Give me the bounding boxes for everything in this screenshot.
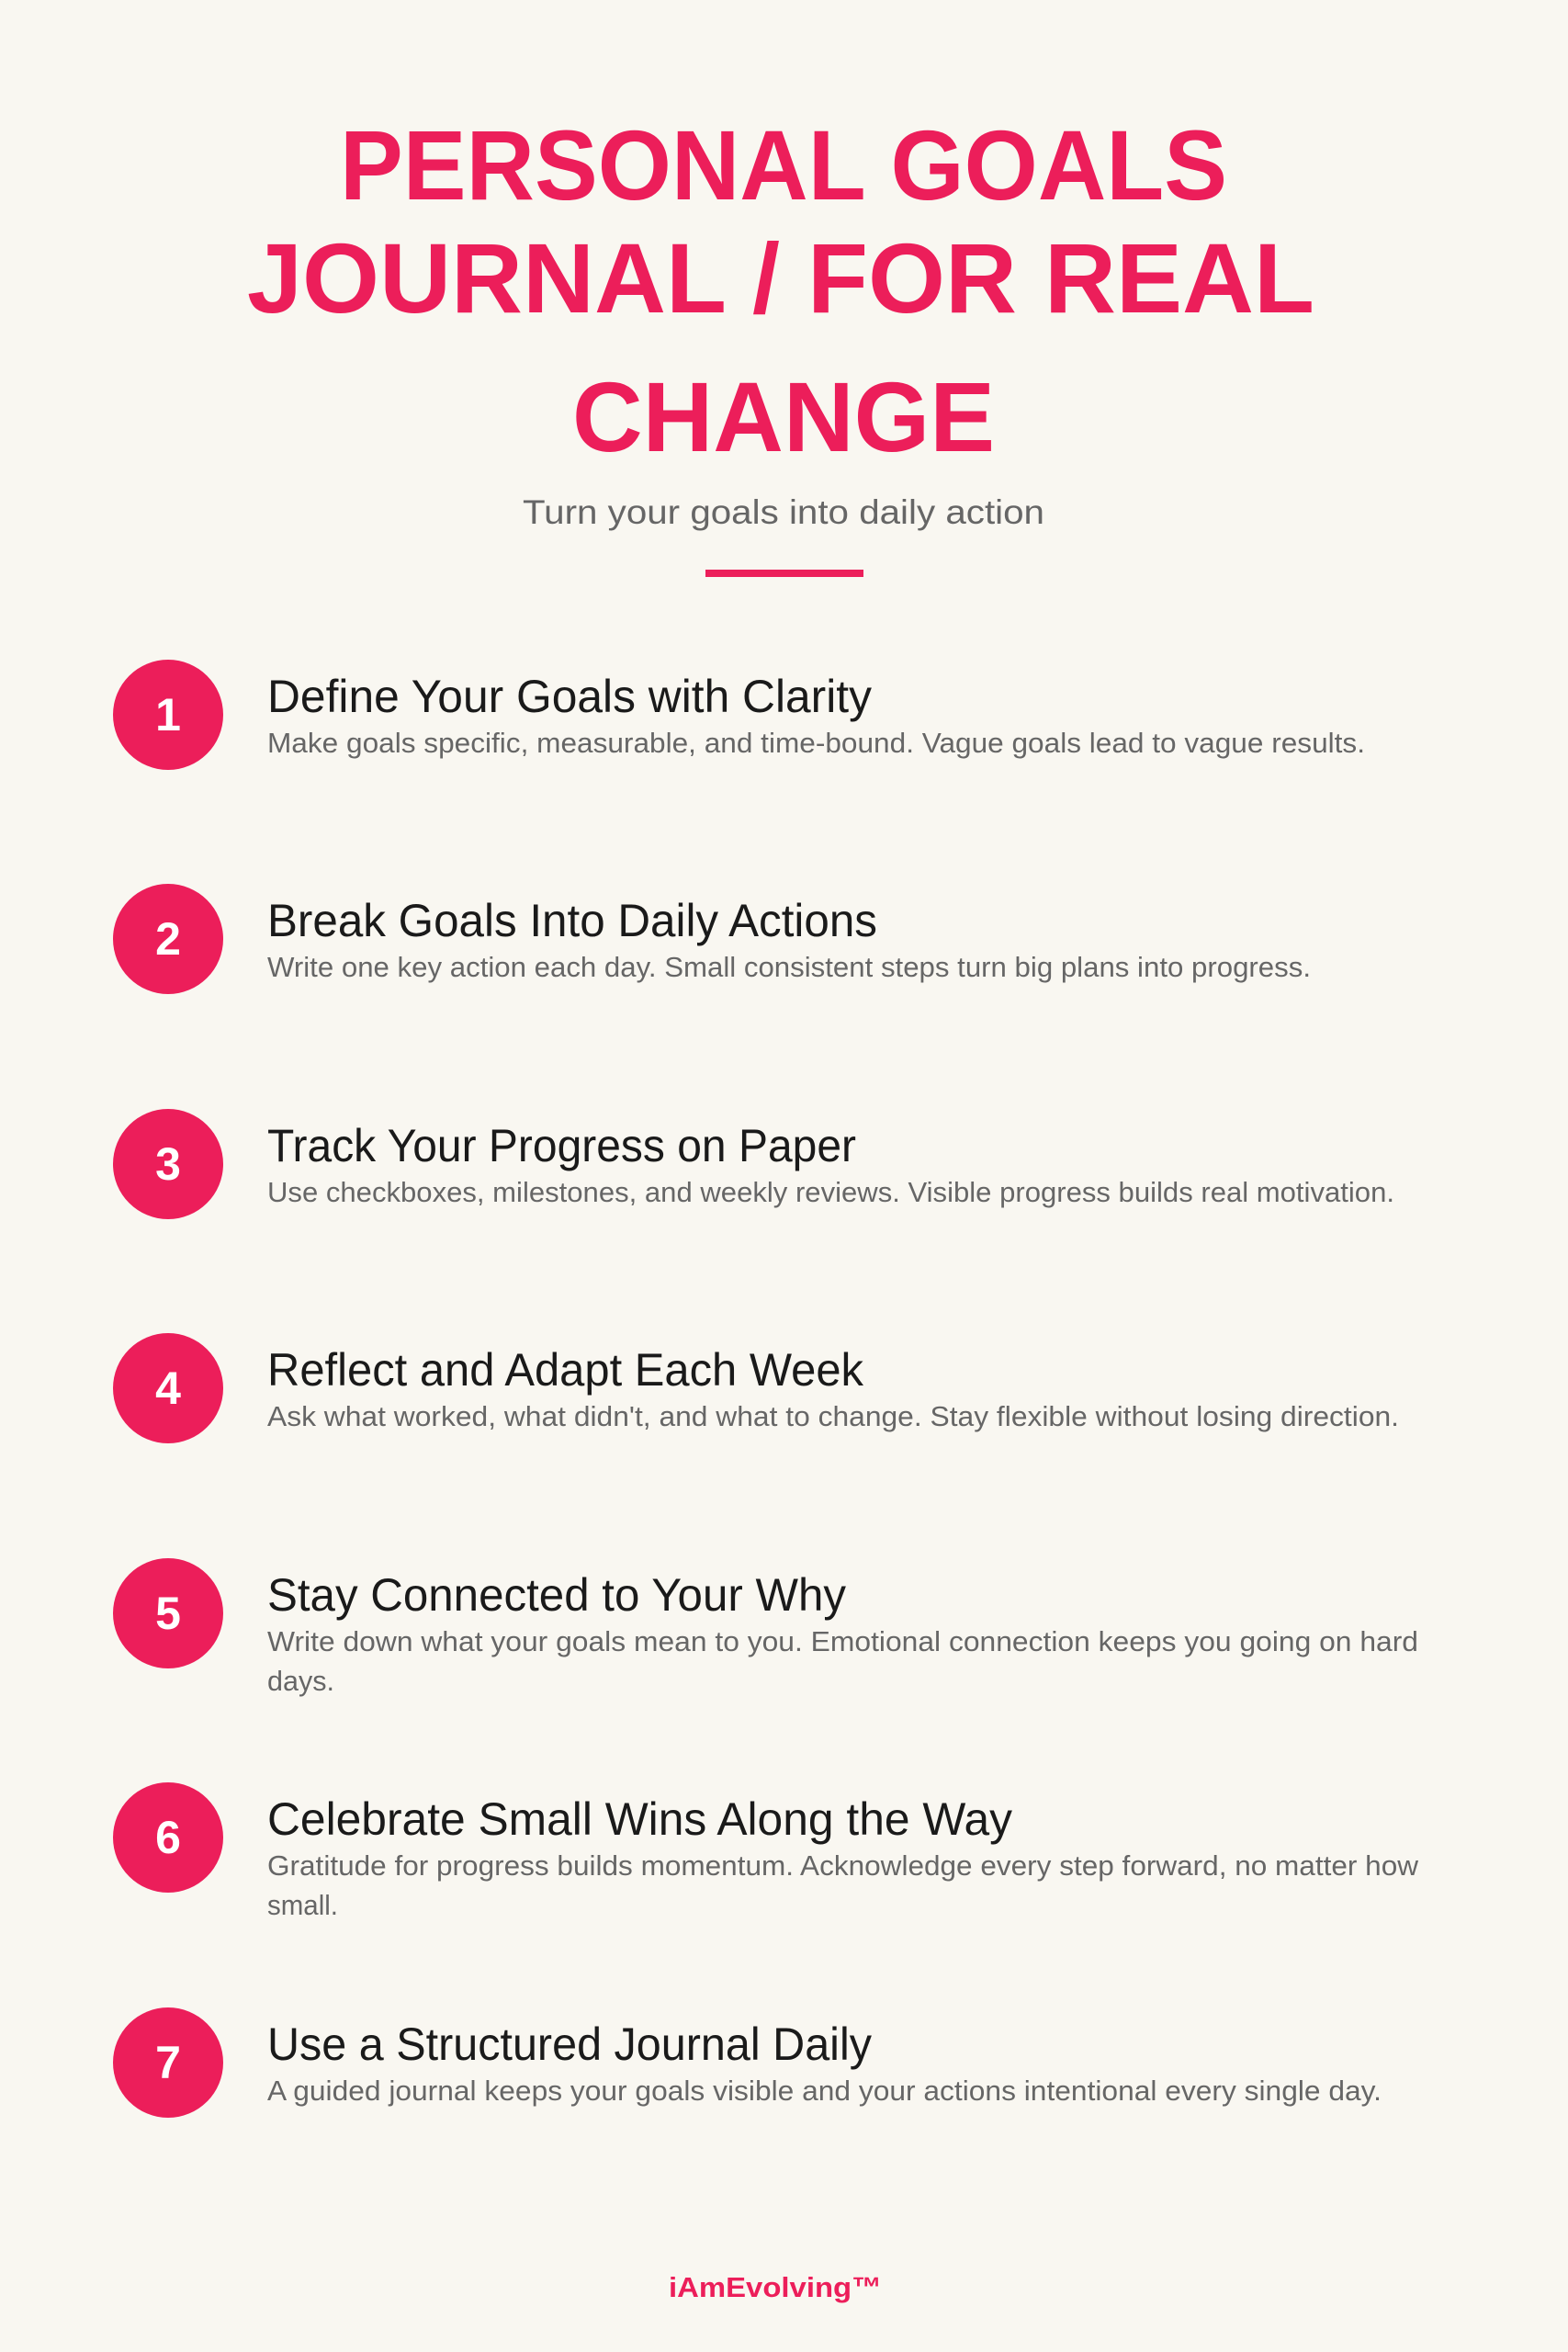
item 3: Track Your Progress on Paper — [267, 1120, 856, 1171]
item 1: Make goals specific, measurable, and time-bound. Vague goals lead to vague results. — [267, 727, 1365, 759]
item 2: Write one key action each day. Small consistent steps turn big plans into progress. — [267, 951, 1311, 983]
item 7: 7 — [155, 2037, 181, 2088]
item 5 — [113, 1558, 1418, 1697]
item 4 — [113, 1333, 1399, 1443]
item 5: Write down what your goals mean to you. Emotional connection keeps you going on hard — [267, 1625, 1418, 1657]
divider bar — [705, 570, 863, 577]
subtitle: Turn your goals into daily action — [523, 493, 1044, 531]
item 7: A guided journal keeps your goals visible and your actions intentional every single day. — [267, 2075, 1382, 2107]
item 5: 5 — [155, 1588, 181, 1639]
item 6: 6 — [155, 1812, 181, 1863]
item 3 — [113, 1109, 1394, 1219]
item 6: Celebrate Small Wins Along the Way — [267, 1793, 1012, 1845]
title — [247, 109, 1314, 472]
title: CHANGE — [572, 361, 995, 472]
item 1 — [113, 660, 1365, 770]
item 1: Define Your Goals with Clarity — [267, 671, 872, 722]
item 5: days. — [267, 1665, 334, 1697]
item 1: 1 — [155, 689, 181, 741]
item 6 — [113, 1782, 1419, 1921]
item 7 — [113, 2007, 1382, 2118]
item 4: Ask what worked, what didn't, and what to change. Stay flexible without losing direction. — [267, 1400, 1399, 1432]
item 4: Reflect and Adapt Each Week — [267, 1344, 864, 1396]
item 7: Use a Structured Journal Daily — [267, 2018, 872, 2070]
item 4: 4 — [155, 1363, 181, 1414]
title: PERSONAL GOALS — [340, 109, 1227, 220]
item 2: Break Goals Into Daily Actions — [267, 895, 877, 946]
title: JOURNAL / FOR REAL — [247, 222, 1314, 334]
footer brand: iAmEvolving™ — [669, 2271, 882, 2303]
item 6: small. — [267, 1889, 338, 1921]
item 5: Stay Connected to Your Why — [267, 1569, 846, 1621]
item 3: 3 — [155, 1138, 181, 1190]
item 6: Gratitude for progress builds momentum. Acknowledge every step forward, no matter how — [267, 1849, 1419, 1882]
item 2: 2 — [155, 913, 181, 965]
item 2 — [113, 884, 1311, 994]
item 3: Use checkboxes, milestones, and weekly reviews. Visible progress builds real motivation. — [267, 1176, 1394, 1208]
